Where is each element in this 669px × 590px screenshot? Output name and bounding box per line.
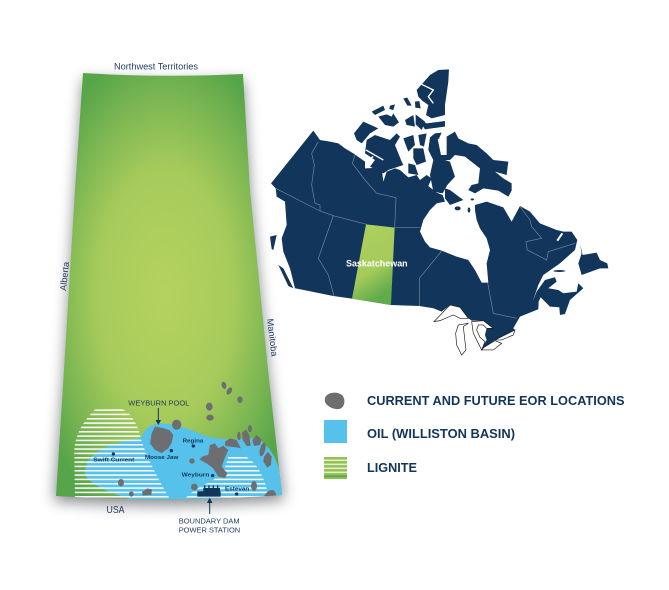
legend label: lignite: LIGNITE: [367, 461, 417, 475]
city markers: [112, 444, 238, 496]
icon: EOR location: [325, 393, 344, 409]
legend label: EOR locations: CURRENT AND FUTURE EOR LOCATIONS: [367, 394, 624, 408]
label: Manitoba: Manitoba: [265, 318, 280, 357]
Saskatchewan highlight: [352, 224, 395, 305]
oil region: Williston Basin: [85, 423, 285, 507]
city labels: Estevan: [225, 486, 250, 492]
province shape with green gradient: [56, 73, 282, 499]
Arctic islands: [354, 69, 449, 175]
city labels: Regina: [183, 438, 204, 444]
Newfoundland: [578, 243, 608, 275]
label: USA: USA: [106, 505, 125, 516]
lignite hatching: south-east: [186, 457, 268, 498]
Hudson Bay islands: [445, 188, 474, 213]
panel: Canada locator map: [270, 69, 608, 355]
Melville Peninsula: [430, 160, 455, 193]
white channels: [366, 84, 562, 241]
label: Boundary Dam Power Station: BOUNDARY DAM: [179, 516, 240, 526]
map shadow: [54, 79, 284, 505]
icon: oil swatch: [324, 420, 347, 443]
label: Boundary Dam Power Station: [179, 516, 240, 534]
southern resource layers: [74, 381, 285, 507]
lignite hatching: west: [74, 409, 173, 503]
label: Saskatchewan: Saskatchewan: [346, 259, 408, 269]
city labels: [93, 438, 250, 492]
Baffin lake: [466, 165, 471, 175]
arrow: Weyburn Pool: [156, 408, 161, 425]
Great Lakes outlines: [434, 305, 515, 355]
mainland Canada: [271, 131, 583, 350]
city labels: Weyburn: [182, 473, 210, 479]
label: Boundary Dam Power Station: POWER STATION: [179, 525, 240, 534]
city labels: Moose Jaw: [145, 455, 179, 461]
label: Northwest Territories: Northwest Territories: [114, 62, 199, 72]
label: Weyburn Pool: WEYBURN POOL: [128, 398, 189, 408]
panel: Saskatchewan detail map: [54, 62, 285, 534]
label: Alberta: Alberta: [58, 261, 71, 291]
Vancouver Island: [278, 265, 293, 288]
Baffin Island: [428, 132, 512, 197]
legend label: oil: OIL (WILLISTON BASIN): [367, 427, 515, 441]
EOR location blobs: [118, 381, 276, 497]
icon: lignite swatch: [324, 457, 347, 479]
Anticosti: [553, 270, 565, 272]
province borders: [276, 142, 575, 318]
arrow: Boundary Dam: [207, 498, 212, 514]
icon: power station: [197, 485, 221, 497]
legend: [324, 393, 624, 479]
Haida Gwaii: [270, 235, 277, 250]
city labels: Swift Current: [93, 457, 134, 463]
